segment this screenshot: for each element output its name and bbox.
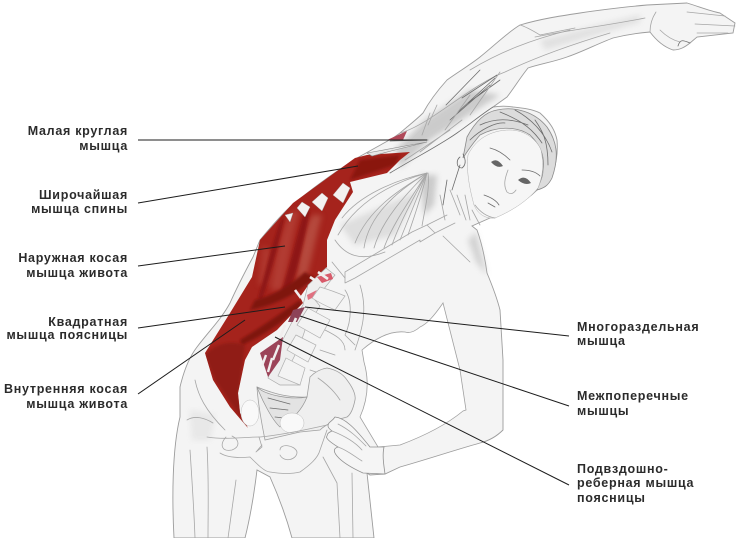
neck and collarbone <box>345 165 480 283</box>
face <box>467 130 543 218</box>
label: Наружная косая мышца живота: Наружная косая <box>18 251 128 265</box>
hand on hip <box>327 417 385 474</box>
label: Широчайшая мышца спины: мышца спины <box>31 202 128 216</box>
label: Подвздошно-реберная мышца поясницы: Подвздошно- <box>577 462 669 476</box>
label: Многораздельная мышца: Многораздельная <box>577 320 699 334</box>
waist gap between arm and torso <box>360 303 466 447</box>
label: Квадратная мышца поясницы: мышца поясницы <box>6 328 128 342</box>
label: Подвздошно-реберная мышца поясницы: реберная мышца <box>577 476 695 490</box>
head and hair <box>457 109 556 218</box>
figure: stretching woman <box>173 3 735 538</box>
body silhouette <box>173 3 735 538</box>
label: Многораздельная мышца <box>305 307 699 348</box>
label: Многораздельная мышца: мышца <box>577 334 626 348</box>
serratus and pectoral fan <box>332 173 428 278</box>
eyebrows and eyes <box>490 148 540 176</box>
muscle: teres minor <box>367 131 428 156</box>
label: Межпоперечные мышцы: мышцы <box>577 404 629 418</box>
label: Межпоперечные мышцы <box>300 316 689 418</box>
label: Квадратная мышца поясницы <box>6 307 285 342</box>
serratus teeth <box>285 183 350 222</box>
pelvis <box>187 368 355 474</box>
muscle: multifidus and intertransversarii <box>260 272 333 377</box>
muscle: latissimus and external oblique (red) <box>205 152 410 428</box>
label: Наружная косая мышца живота <box>18 246 285 280</box>
shading <box>190 15 640 440</box>
legs <box>190 447 353 538</box>
label: Широчайшая мышца спины <box>31 166 358 216</box>
spine <box>268 268 364 385</box>
label: Квадратная мышца поясницы: Квадратная <box>48 315 128 329</box>
label: Малая круглая мышца: мышца <box>79 139 128 153</box>
label: Внутренняя косая мышца живота: Внутренняя косая <box>4 382 128 396</box>
label: Подвздошно-реберная мышца поясницы: поясницы <box>577 491 646 505</box>
label: Малая круглая мышца: Малая круглая <box>28 124 128 138</box>
nose and mouth <box>505 170 516 194</box>
label: Межпоперечные мышцы: Межпоперечные <box>577 389 689 403</box>
sacrum <box>257 387 307 427</box>
label: Внутренняя косая мышца живота <box>4 320 245 411</box>
label: Подвздошно-реберная мышца поясницы <box>275 337 695 505</box>
ear <box>457 154 465 168</box>
arm detail <box>390 12 735 173</box>
label: Наружная косая мышца живота: мышца живота <box>26 266 128 280</box>
label: Широчайшая мышца спины: Широчайшая <box>39 188 128 202</box>
label: Малая круглая мышца <box>28 124 427 153</box>
label: Внутренняя косая мышца живота: мышца живота <box>26 397 128 411</box>
